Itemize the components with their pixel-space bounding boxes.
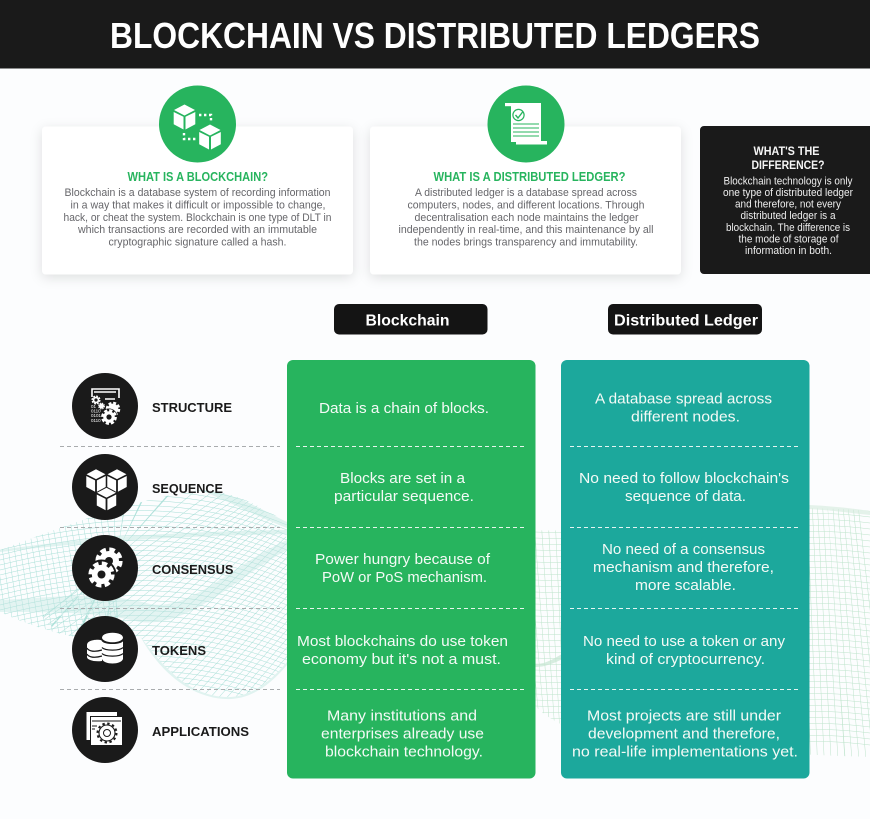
icon: linked blocks [159, 86, 236, 162]
label: APPLICATIONS [152, 724, 249, 739]
icon: gears [72, 535, 138, 601]
column heading: Blockchain [334, 304, 488, 334]
cell: applications: enterprises already use [321, 726, 484, 742]
row: sequence [72, 454, 223, 520]
cell: structure: Data is a chain of blocks. [319, 400, 489, 417]
text block [64, 187, 332, 248]
cell: sequence: Blocks are set in a [340, 470, 466, 487]
cell: applications: Many institutions and [327, 708, 477, 724]
cell: applications: Most projects are still under [587, 708, 781, 724]
column heading: Blockchain: Blockchain [366, 312, 450, 330]
cell: tokens: Most blockchains do use token [297, 633, 508, 650]
text block: blockchain. The difference is [726, 222, 850, 234]
panel: blockchain column [287, 360, 536, 778]
heading: WHAT IS A DISTRIBUTED LEDGER? [434, 169, 626, 184]
row: consensus [72, 535, 234, 601]
icon: structure [72, 373, 138, 439]
cell: structure: different nodes. [631, 408, 740, 426]
text block: computers, nodes, and different locations. Through [408, 200, 644, 212]
cell: structure [595, 390, 772, 426]
panel: what is a distributed ledger [370, 86, 681, 274]
icon: ledger scroll [488, 86, 564, 162]
text block: in a way that makes it difficult or impossible to change, [70, 200, 326, 212]
text block: Blockchain technology is only [724, 176, 853, 188]
icon: three cubes [72, 454, 138, 520]
text block: which transactions are recorded with an immutable [77, 224, 317, 236]
row: structure [72, 373, 232, 439]
cell: applications: blockchain technology. [325, 744, 483, 760]
column heading: Distributed Ledger [608, 304, 762, 334]
cell: consensus [593, 541, 774, 594]
icon: structure: 0101 [91, 413, 102, 418]
icon: coin stacks [72, 616, 138, 682]
background mesh wave: right green [536, 505, 870, 757]
cell: sequence [334, 470, 474, 505]
cell: sequence [579, 470, 789, 505]
cell: tokens: kind of cryptocurrency. [606, 651, 765, 668]
text block [723, 176, 853, 257]
heading: WHAT IS A BLOCKCHAIN? [128, 169, 268, 184]
cell: consensus: mechanism and therefore, [593, 559, 774, 576]
cell: consensus: more scalable. [635, 577, 736, 594]
icon: structure: 01 [91, 404, 97, 409]
text block: A distributed ledger is a database spread across [415, 187, 637, 199]
text block: the mode of storage of [738, 234, 839, 246]
title bar [0, 0, 870, 68]
row: tokens [72, 616, 206, 682]
label: SEQUENCE [152, 481, 223, 496]
label: CONSENSUS [152, 562, 234, 577]
cell: consensus: Power hungry because of [315, 551, 491, 568]
cell: applications [321, 708, 484, 760]
cell: structure: A database spread across [595, 390, 772, 408]
text block: independently in real-time, and this maintenance by all [398, 224, 654, 236]
title bar: BLOCKCHAIN VS DISTRIBUTED LEDGERS [110, 15, 760, 56]
label: STRUCTURE [152, 400, 232, 415]
text block [398, 187, 654, 248]
cell: consensus: PoW or PoS mechanism. [322, 569, 487, 586]
text block: Blockchain is a database system of recording information [64, 187, 330, 199]
label: TOKENS [152, 643, 206, 658]
cell: applications: no real-life implementations yet. [572, 744, 798, 760]
cell: tokens: economy but it's not a must. [302, 651, 501, 668]
icon: structure: 0110 [91, 418, 101, 423]
cell: consensus: No need of a consensus [602, 541, 765, 558]
icon: application windows [72, 697, 138, 763]
icon: structure: 0110 [91, 408, 101, 414]
row: applications [72, 697, 249, 763]
background mesh wave: left teal [0, 480, 287, 710]
cell: tokens: No need to use a token or any [583, 633, 785, 650]
heading: DIFFERENCE? [752, 158, 824, 172]
heading [752, 144, 824, 172]
text block: hack, or cheat the system. Blockchain is one type of DLT in [64, 212, 332, 224]
text block: the nodes brings transparency and immutability. [414, 236, 638, 248]
cell: applications [572, 708, 798, 760]
text block: decentralisation each node maintains the ledger [414, 212, 639, 224]
cell: tokens [583, 633, 785, 668]
row divider lines [60, 446, 280, 690]
cell: sequence: sequence of data. [625, 488, 746, 505]
panel: what's the difference [700, 126, 870, 274]
text block: and therefore, not every [735, 198, 841, 210]
cell: consensus [315, 551, 491, 586]
text block: cryptographic signature called a hash. [108, 236, 286, 248]
text block: information in both. [745, 245, 832, 257]
column heading: Distributed Ledger: Distributed Ledger [614, 312, 758, 330]
text block: one type of distributed ledger [723, 187, 853, 199]
heading: WHAT'S THE [754, 144, 820, 158]
panel: distributed ledger column [561, 360, 810, 778]
cell: sequence: No need to follow blockchain's [579, 470, 789, 487]
cell: applications: development and therefore, [588, 726, 780, 742]
cell: sequence: particular sequence. [334, 488, 474, 505]
cell: tokens [297, 633, 508, 668]
panel: what is a blockchain [42, 86, 353, 274]
text block: distributed ledger is a [740, 210, 836, 222]
